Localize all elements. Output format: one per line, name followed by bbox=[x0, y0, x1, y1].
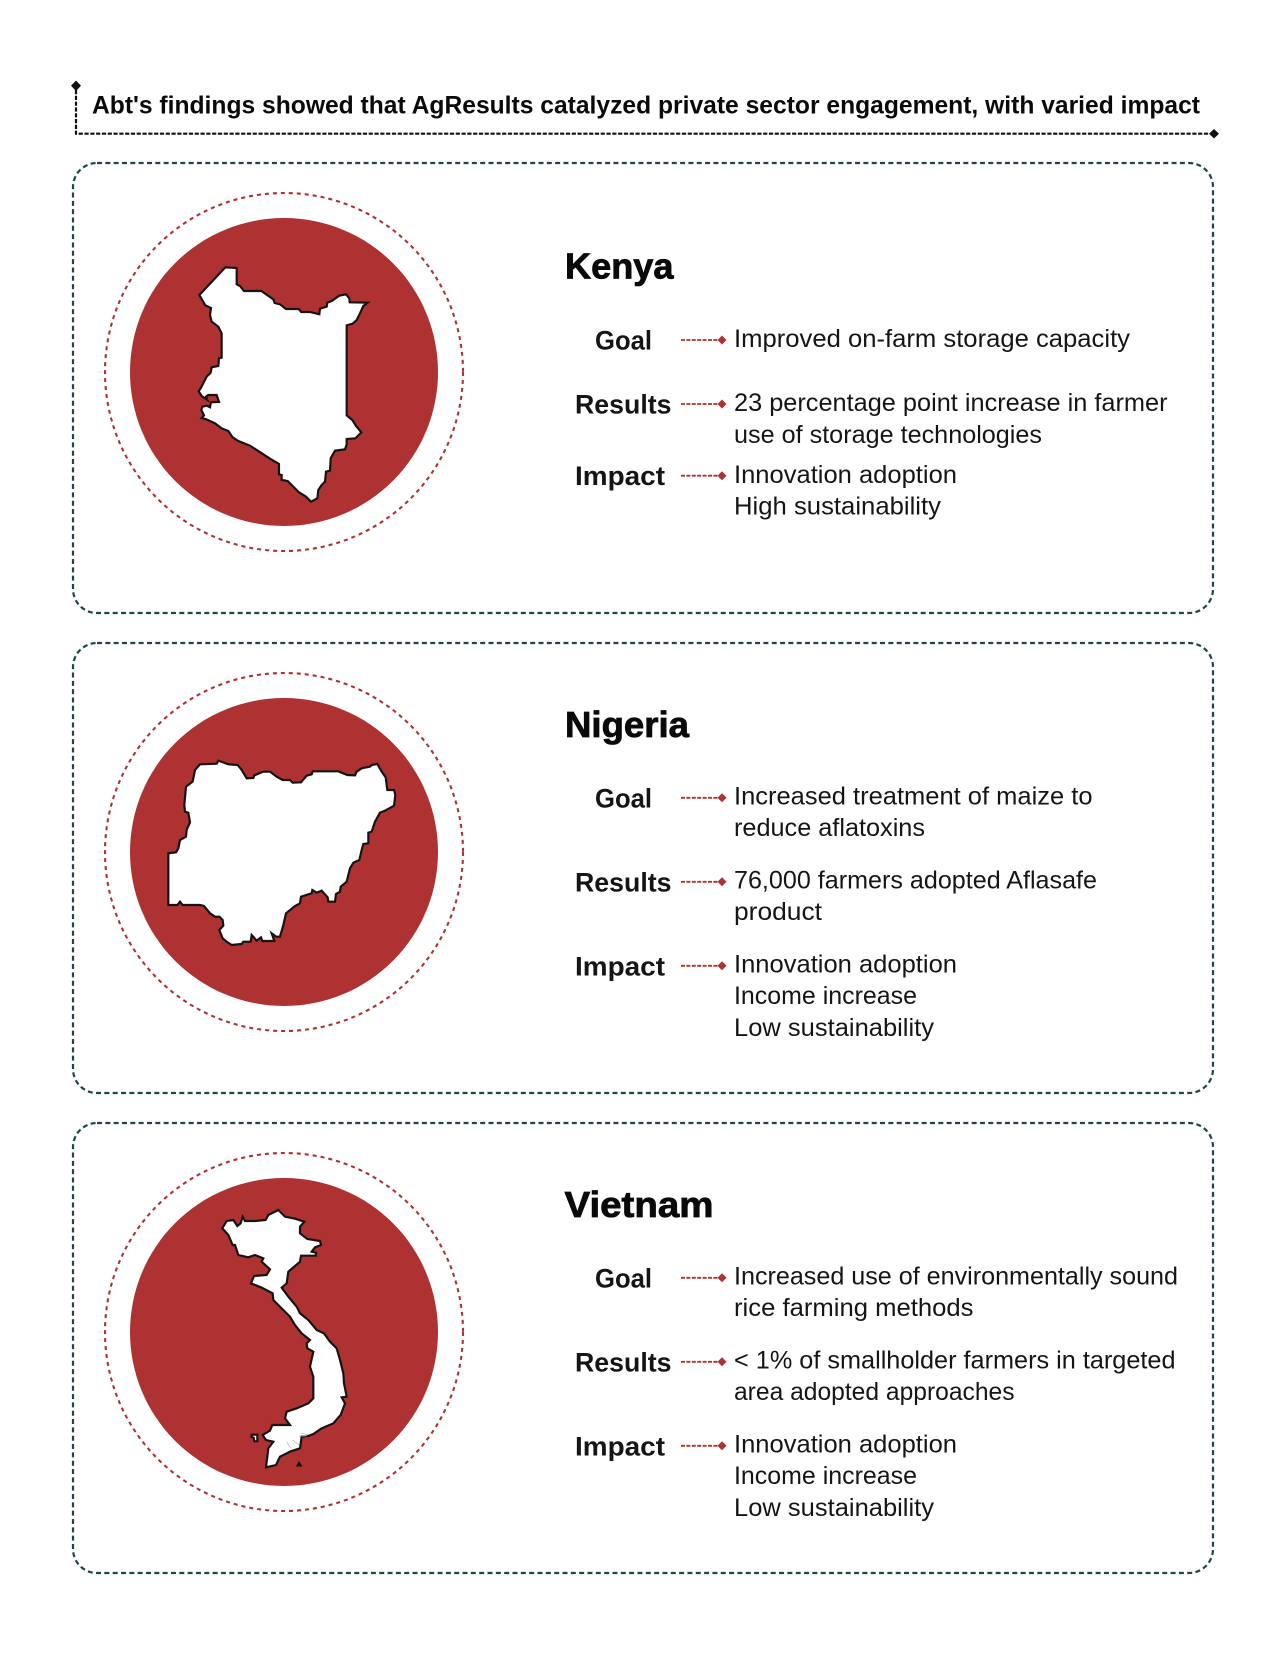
heading: Kenya: Kenya bbox=[565, 246, 674, 286]
goal text bbox=[734, 782, 1092, 842]
results text bbox=[734, 389, 1168, 449]
impact text: Income increase bbox=[734, 1462, 917, 1490]
heading: Nigeria: Nigeria bbox=[565, 704, 690, 745]
arrow bbox=[681, 471, 726, 480]
arrow bbox=[681, 1357, 726, 1366]
panel: Nigeria bbox=[73, 643, 1213, 1093]
goal text: Improved on-farm storage capacity bbox=[734, 325, 1131, 353]
results text: 23 percentage point increase in farmer bbox=[734, 389, 1168, 417]
results text: < 1% of smallholder farmers in targeted bbox=[734, 1346, 1176, 1374]
row: Vietnam goal bbox=[595, 1262, 1178, 1322]
row: Nigeria goal bbox=[595, 782, 1092, 842]
impact text bbox=[734, 950, 957, 1042]
arrow bbox=[681, 1441, 726, 1450]
title: Abt's findings showed that AgResults catalyzed private sector engagement, with varied impact bbox=[92, 92, 1201, 120]
label: Impact: Impact bbox=[575, 951, 665, 981]
label: Results: Results bbox=[575, 390, 672, 420]
row: Vietnam impact bbox=[575, 1430, 957, 1522]
arrow bbox=[681, 400, 726, 408]
panel: Kenya bbox=[73, 163, 1213, 613]
goal text: Increased use of environmentally sound bbox=[734, 1262, 1178, 1290]
impact text bbox=[734, 1430, 957, 1522]
impact text: Innovation adoption bbox=[734, 1430, 957, 1458]
arrow bbox=[681, 336, 726, 344]
label: Results: Results bbox=[575, 1348, 672, 1378]
row: Nigeria impact bbox=[575, 950, 957, 1042]
impact text: Low sustainability bbox=[734, 1494, 935, 1522]
impact text: Income increase bbox=[734, 982, 917, 1010]
results text bbox=[734, 1346, 1176, 1406]
impact text: Innovation adoption bbox=[734, 950, 957, 978]
arrow bbox=[681, 793, 726, 802]
goal text bbox=[734, 1262, 1178, 1322]
impact text: Low sustainability bbox=[734, 1014, 935, 1042]
label: Results: Results bbox=[575, 868, 672, 898]
label: Goal: Goal bbox=[595, 1264, 652, 1294]
goal text: Increased treatment of maize to bbox=[734, 782, 1092, 810]
label: Goal: Goal bbox=[595, 784, 652, 814]
title bracket line bbox=[71, 80, 1219, 138]
arrow bbox=[681, 961, 726, 970]
arrow bbox=[681, 1273, 726, 1282]
icon: Nigeria map in red circle bbox=[105, 673, 463, 1031]
row: Kenya impact bbox=[575, 461, 957, 520]
results text: 76,000 farmers adopted Aflasafe bbox=[734, 866, 1097, 894]
label: Impact: Impact bbox=[575, 1431, 665, 1461]
goal text: rice farming methods bbox=[734, 1294, 974, 1322]
results text: product bbox=[734, 898, 822, 926]
panel: Vietnam bbox=[73, 1123, 1213, 1573]
impact text: Innovation adoption bbox=[734, 461, 957, 489]
row: Vietnam results bbox=[575, 1346, 1176, 1406]
goal text: reduce aflatoxins bbox=[734, 814, 925, 842]
icon: Kenya map in red circle bbox=[105, 193, 463, 551]
row: Nigeria results bbox=[575, 866, 1097, 926]
label: Goal: Goal bbox=[595, 326, 652, 356]
heading: Vietnam: Vietnam bbox=[564, 1184, 714, 1225]
arrow bbox=[681, 877, 726, 886]
results text: use of storage technologies bbox=[734, 421, 1042, 449]
row: Kenya results bbox=[575, 389, 1168, 449]
impact text bbox=[734, 461, 957, 520]
results text bbox=[734, 866, 1097, 926]
label: Impact: Impact bbox=[575, 461, 665, 491]
row: Kenya goal bbox=[595, 325, 1131, 356]
results text: area adopted approaches bbox=[734, 1378, 1014, 1406]
icon: Vietnam map in red circle bbox=[105, 1153, 463, 1511]
impact text: High sustainability bbox=[734, 492, 942, 520]
